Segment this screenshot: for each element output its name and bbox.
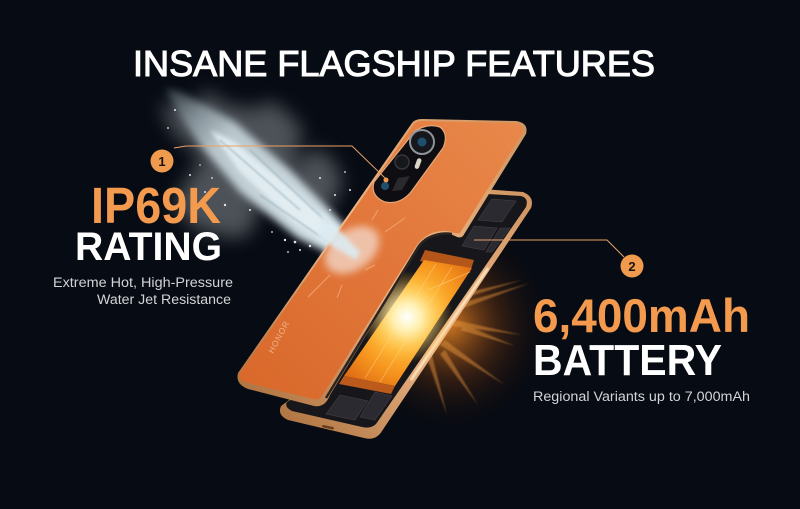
battery heading: BATTERY [533, 336, 722, 385]
splash drops [308, 210, 405, 298]
number badge 1 [150, 150, 174, 172]
battery glow burst [350, 220, 550, 430]
island body [373, 126, 445, 203]
title: INSANE FLAGSHIP FEATURES [133, 43, 655, 84]
island label patch [392, 176, 410, 191]
water jet spray [155, 81, 362, 264]
burst halo [350, 220, 550, 430]
bright stream core [210, 130, 358, 258]
burst rays [427, 280, 530, 415]
battery [344, 260, 472, 386]
badge number 2: 2 [628, 259, 636, 274]
battery description: Regional Variants up to 7,000mAh [533, 389, 750, 404]
main lens glass [418, 138, 426, 146]
stream shadow streaks [220, 140, 340, 250]
third lens [381, 182, 389, 190]
main water stream [165, 88, 362, 264]
dark internals [286, 193, 527, 428]
callout 1 [150, 146, 388, 182]
battery top edge [420, 250, 474, 272]
main lens [410, 130, 434, 154]
rating description line 1: Extreme Hot, High-Pressure [53, 275, 233, 290]
splash on cover [308, 210, 405, 298]
callout 2 [474, 240, 644, 278]
battery streaks [365, 264, 470, 382]
notch edge parts [326, 234, 452, 398]
IP69K heading: IP69K [91, 177, 221, 234]
brand wordmark: HONOR [266, 319, 291, 355]
glowing rim highlight [411, 268, 488, 380]
camera island [373, 126, 445, 203]
phone: orange back cover [237, 119, 527, 406]
gold rim [237, 119, 527, 406]
capacity heading: 6,400mAh [533, 289, 750, 342]
badge number 1: 1 [158, 154, 166, 169]
leader line 2 [474, 240, 624, 257]
splash blob [316, 216, 388, 284]
bottom frame port [322, 425, 334, 430]
water droplets [167, 109, 351, 253]
phone: inner frame [280, 189, 532, 439]
number badge 2 [620, 254, 644, 278]
spray mist [155, 81, 339, 253]
gold frame [280, 189, 532, 439]
feature: battery [533, 289, 750, 404]
anchor dot 1 [384, 178, 388, 182]
leader line 1 [174, 146, 385, 178]
feature: IP69K rating [53, 177, 233, 307]
cover surface [239, 121, 523, 399]
second lens [395, 155, 409, 169]
flash [414, 158, 422, 169]
jet tip over cover [318, 212, 360, 260]
rating heading: RATING [75, 225, 222, 269]
circuit blocks [326, 199, 516, 420]
battery core glow [361, 271, 453, 363]
rating description line 2: Water Jet Resistance [97, 292, 231, 307]
battery bottom edge [339, 376, 395, 394]
